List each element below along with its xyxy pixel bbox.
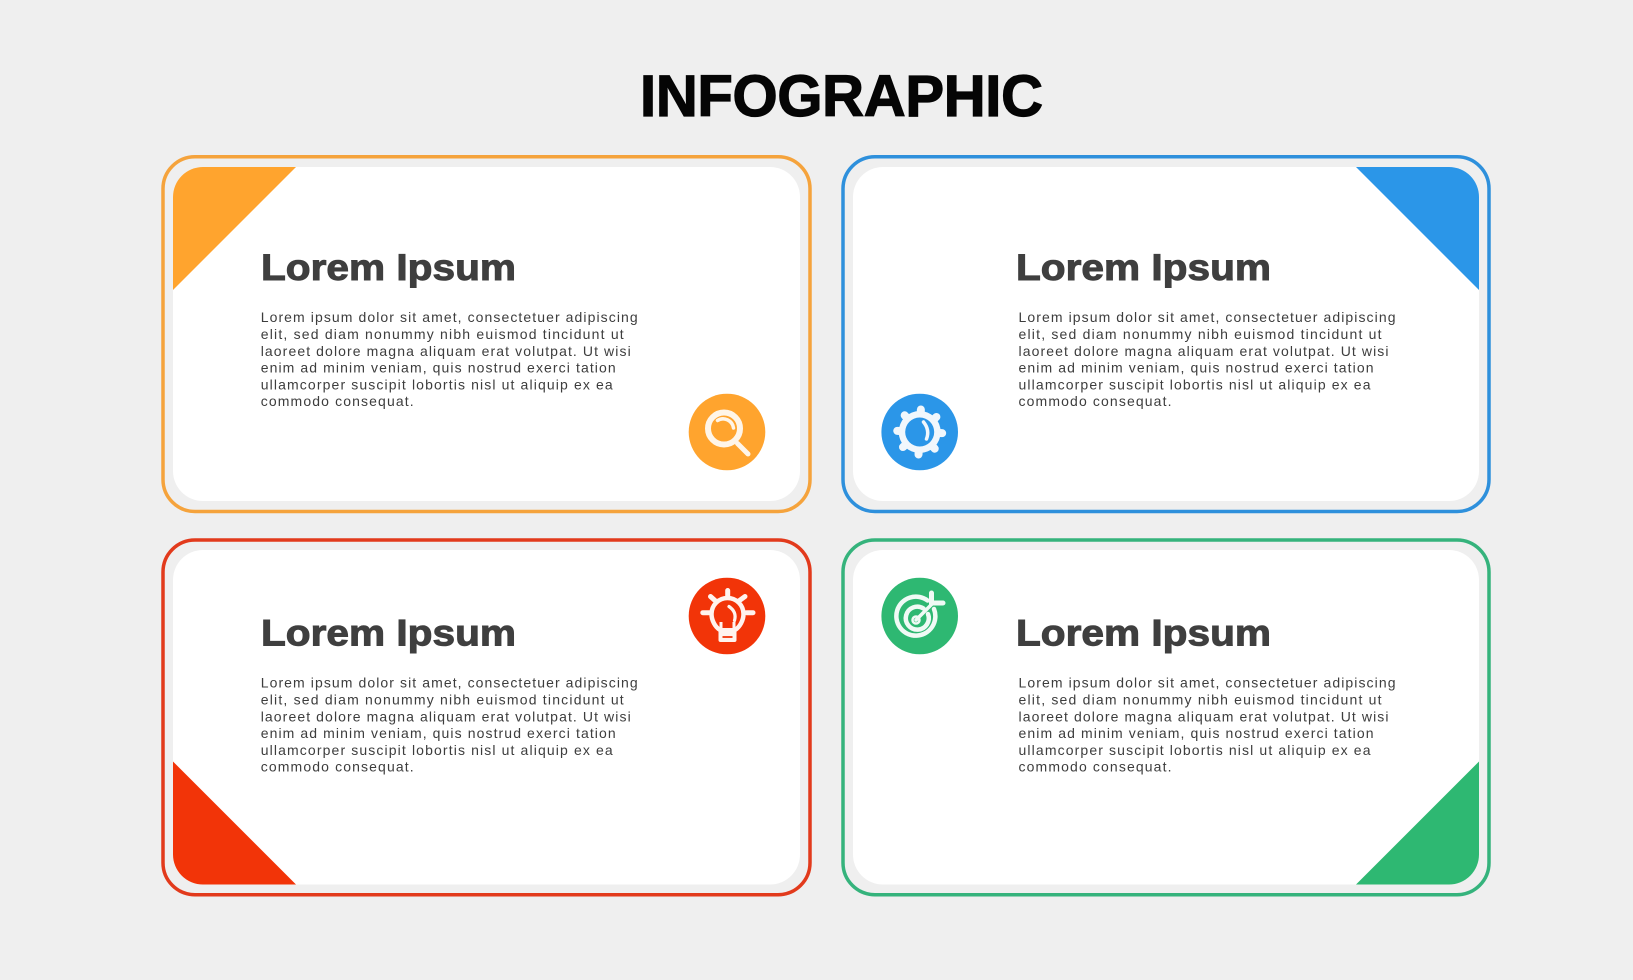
body text: Lorem ipsum dolor sit amet, consectetuer adipiscing xyxy=(261,309,638,325)
body text: commodo consequat. xyxy=(1018,758,1172,774)
body text: enim ad minim veniam, quis nostrud exerci tation xyxy=(261,725,616,741)
corner triangle xyxy=(1356,762,1479,884)
icon: magnifying glass xyxy=(689,394,765,470)
body text: commodo consequat. xyxy=(261,393,414,409)
body text xyxy=(1018,674,1396,774)
panel card xyxy=(173,550,800,884)
body text: elit, sed diam nonummy nibh euismod tincidunt ut xyxy=(1018,326,1382,342)
panel: top-right blue xyxy=(843,157,1489,512)
panel card xyxy=(853,550,1479,884)
corner triangle xyxy=(173,167,296,290)
body text: Lorem ipsum dolor sit amet, consectetuer adipiscing xyxy=(261,674,638,690)
panel border xyxy=(843,157,1489,512)
panel border xyxy=(163,540,810,895)
body text: laoreet dolore magna aliquam erat volutpat. Ut wisi xyxy=(261,343,631,359)
heading: Lorem Ipsum xyxy=(261,247,516,288)
body text: ullamcorper suscipit lobortis nisl ut aliquip ex ea xyxy=(261,742,613,758)
body text: elit, sed diam nonummy nibh euismod tincidunt ut xyxy=(261,692,624,708)
panel border xyxy=(843,540,1489,895)
title: INFOGRAPHIC xyxy=(640,64,1043,129)
icon: gear xyxy=(881,394,958,470)
heading: Lorem Ipsum xyxy=(1016,247,1271,288)
body text: commodo consequat. xyxy=(1018,393,1172,409)
body text: enim ad minim veniam, quis nostrud exerci tation xyxy=(261,360,616,376)
corner triangle xyxy=(173,762,296,884)
body text: elit, sed diam nonummy nibh euismod tincidunt ut xyxy=(1018,692,1382,708)
icon: light bulb xyxy=(689,578,765,654)
body text: enim ad minim veniam, quis nostrud exerci tation xyxy=(1018,360,1374,376)
panel: bottom-left red xyxy=(163,540,810,895)
panel: bottom-right green xyxy=(843,540,1489,895)
body text: laoreet dolore magna aliquam erat volutpat. Ut wisi xyxy=(1018,708,1388,724)
body text: commodo consequat. xyxy=(261,758,414,774)
body text: laoreet dolore magna aliquam erat volutpat. Ut wisi xyxy=(1018,343,1388,359)
body text: laoreet dolore magna aliquam erat volutpat. Ut wisi xyxy=(261,708,631,724)
body text: ullamcorper suscipit lobortis nisl ut aliquip ex ea xyxy=(261,376,613,392)
heading: Lorem Ipsum xyxy=(261,612,516,654)
body text xyxy=(1018,309,1396,409)
body text xyxy=(261,309,638,409)
panel card xyxy=(173,167,800,501)
panel card xyxy=(853,167,1479,501)
panel border xyxy=(163,157,810,512)
body text: Lorem ipsum dolor sit amet, consectetuer adipiscing xyxy=(1018,309,1396,325)
body text: Lorem ipsum dolor sit amet, consectetuer adipiscing xyxy=(1018,674,1396,690)
corner triangle xyxy=(1356,167,1479,290)
heading: Lorem Ipsum xyxy=(1016,612,1271,654)
body text xyxy=(261,674,638,774)
icon: target with arrow xyxy=(881,578,958,654)
body text: ullamcorper suscipit lobortis nisl ut aliquip ex ea xyxy=(1018,376,1371,392)
panel: top-left orange xyxy=(163,157,810,512)
body text: elit, sed diam nonummy nibh euismod tincidunt ut xyxy=(261,326,624,342)
body text: enim ad minim veniam, quis nostrud exerci tation xyxy=(1018,725,1374,741)
body text: ullamcorper suscipit lobortis nisl ut aliquip ex ea xyxy=(1018,742,1371,758)
